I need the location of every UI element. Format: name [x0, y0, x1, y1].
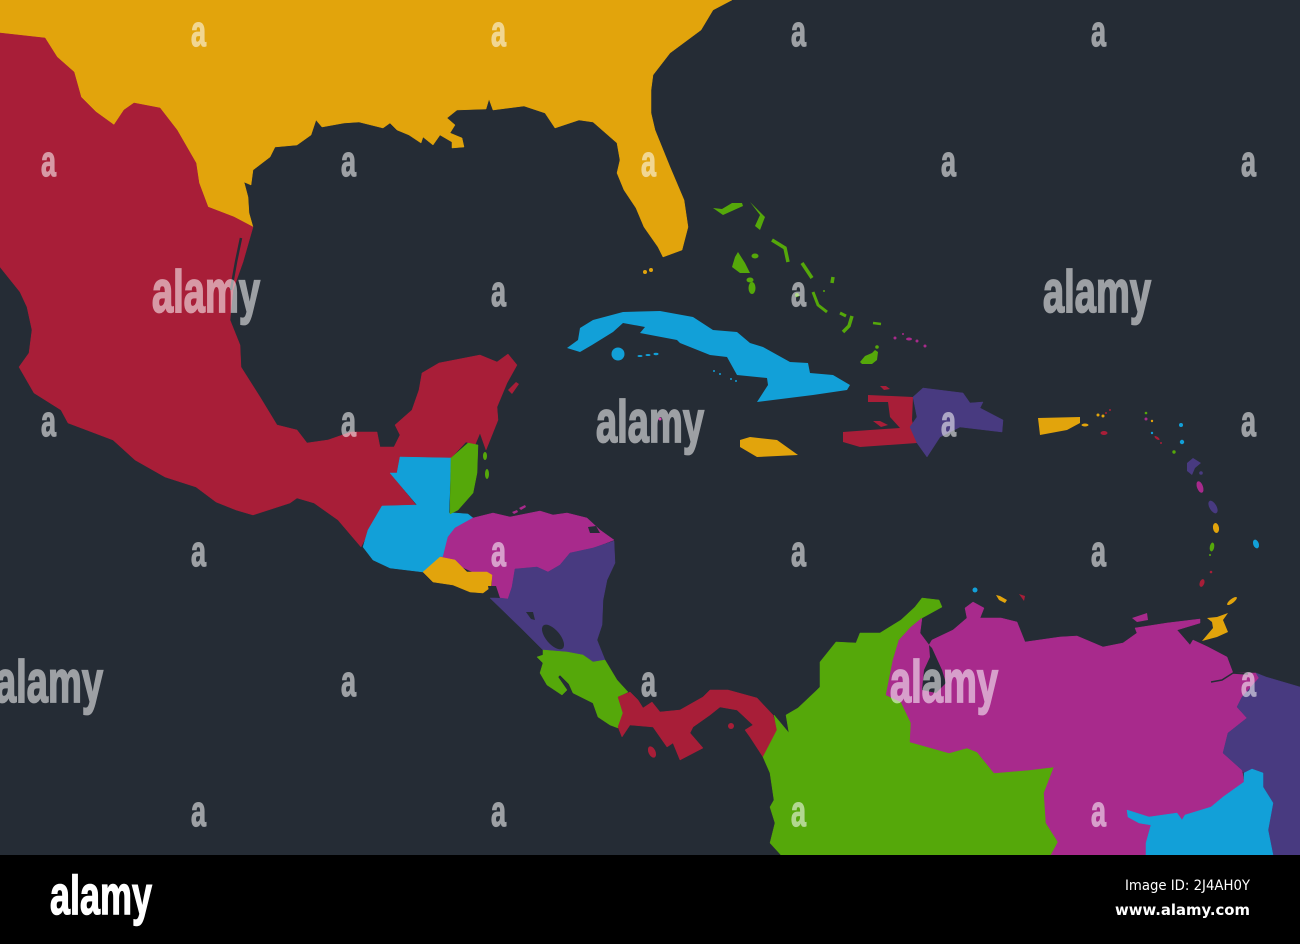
country: Honduras [440, 505, 614, 599]
watermark: alamy large [0, 259, 1151, 715]
footer logo: alamy [50, 864, 152, 926]
watermark: repeated small a: a [941, 137, 956, 186]
watermark: repeated small a: a [1091, 7, 1106, 56]
country: Colombia [763, 598, 1058, 855]
lagoon: Laguna Madre [231, 238, 241, 290]
country: Belize [450, 443, 489, 514]
lake: Nicaragua [538, 621, 568, 653]
website: www.alamy.com [1115, 901, 1250, 919]
watermark: repeated small a: a [1241, 137, 1256, 186]
watermark: repeated small a: a [1241, 657, 1256, 706]
island: Florida Keys [643, 268, 653, 274]
watermark: repeated small a: a [341, 137, 356, 186]
watermark: repeated small a: a [791, 267, 806, 316]
watermark: repeated small a: a [791, 7, 806, 56]
country: Guyana [1223, 673, 1300, 855]
watermark: repeated small a: a [1241, 397, 1256, 446]
watermark: alamy large: alamy [596, 389, 704, 455]
watermark: repeated small a: a [41, 397, 56, 446]
country: Cuba [567, 311, 850, 402]
islands: Turks and Caicos [894, 333, 926, 348]
watermark: repeated small a: a [41, 137, 56, 186]
watermark: repeated small a: a [641, 657, 656, 706]
watermark: alamy large: alamy [1043, 259, 1151, 325]
watermark: repeated small a: a [1091, 787, 1106, 836]
lake: Maracaibo [922, 645, 946, 693]
country: Jamaica [740, 437, 798, 457]
watermark: repeated small a: a [491, 7, 506, 56]
watermark: repeated small a: a [941, 397, 956, 446]
country: Costa Rica [537, 650, 628, 728]
country: El Salvador [423, 557, 492, 593]
gulf: Fonseca [488, 586, 500, 598]
watermark: repeated small a: a [491, 787, 506, 836]
footer bar [0, 855, 1300, 944]
watermark: repeated small a: a [341, 397, 356, 446]
country: Haiti [843, 386, 917, 447]
country: Panama [618, 690, 778, 760]
watermark: repeated small a: a [341, 657, 356, 706]
country: Venezuela [886, 602, 1259, 855]
country: Mexico [0, 33, 519, 547]
watermark: repeated small a: a [191, 7, 206, 56]
watermark: alamy large: alamy [0, 649, 103, 715]
watermark: repeated small a: a [641, 137, 656, 186]
country: United States [0, 0, 732, 257]
watermark: repeated small a: a [191, 527, 206, 576]
country: Dominican Republic [910, 388, 1003, 457]
river delta: Orinoco [1211, 673, 1248, 682]
watermark: repeated small a: a [1091, 527, 1106, 576]
country: Trinidad and Tobago [1202, 596, 1238, 641]
image ID: Image ID: 2J4AH0Y [1125, 878, 1250, 894]
watermark: repeated small a: a [791, 527, 806, 576]
watermark: alamy large: alamy [152, 259, 260, 325]
country: Guatemala [363, 457, 473, 572]
islands: ABC islands [972, 588, 1025, 603]
watermark: repeated small a: a [191, 787, 206, 836]
country: Brazil [1127, 769, 1273, 855]
island: San Andres [658, 418, 662, 420]
watermark: repeated small a: a [491, 527, 506, 576]
lake: Managua [526, 612, 535, 620]
watermark: repeated small a: a [791, 787, 806, 836]
islands: Lesser Antilles [1096, 409, 1260, 588]
lagoon: Caratasca [588, 526, 600, 533]
watermark: repeated small a: a [491, 267, 506, 316]
country: Puerto Rico [1038, 417, 1088, 435]
country: Bahamas [713, 202, 881, 364]
watermark: alamy large: alamy [890, 649, 998, 715]
country: Nicaragua [490, 541, 615, 662]
